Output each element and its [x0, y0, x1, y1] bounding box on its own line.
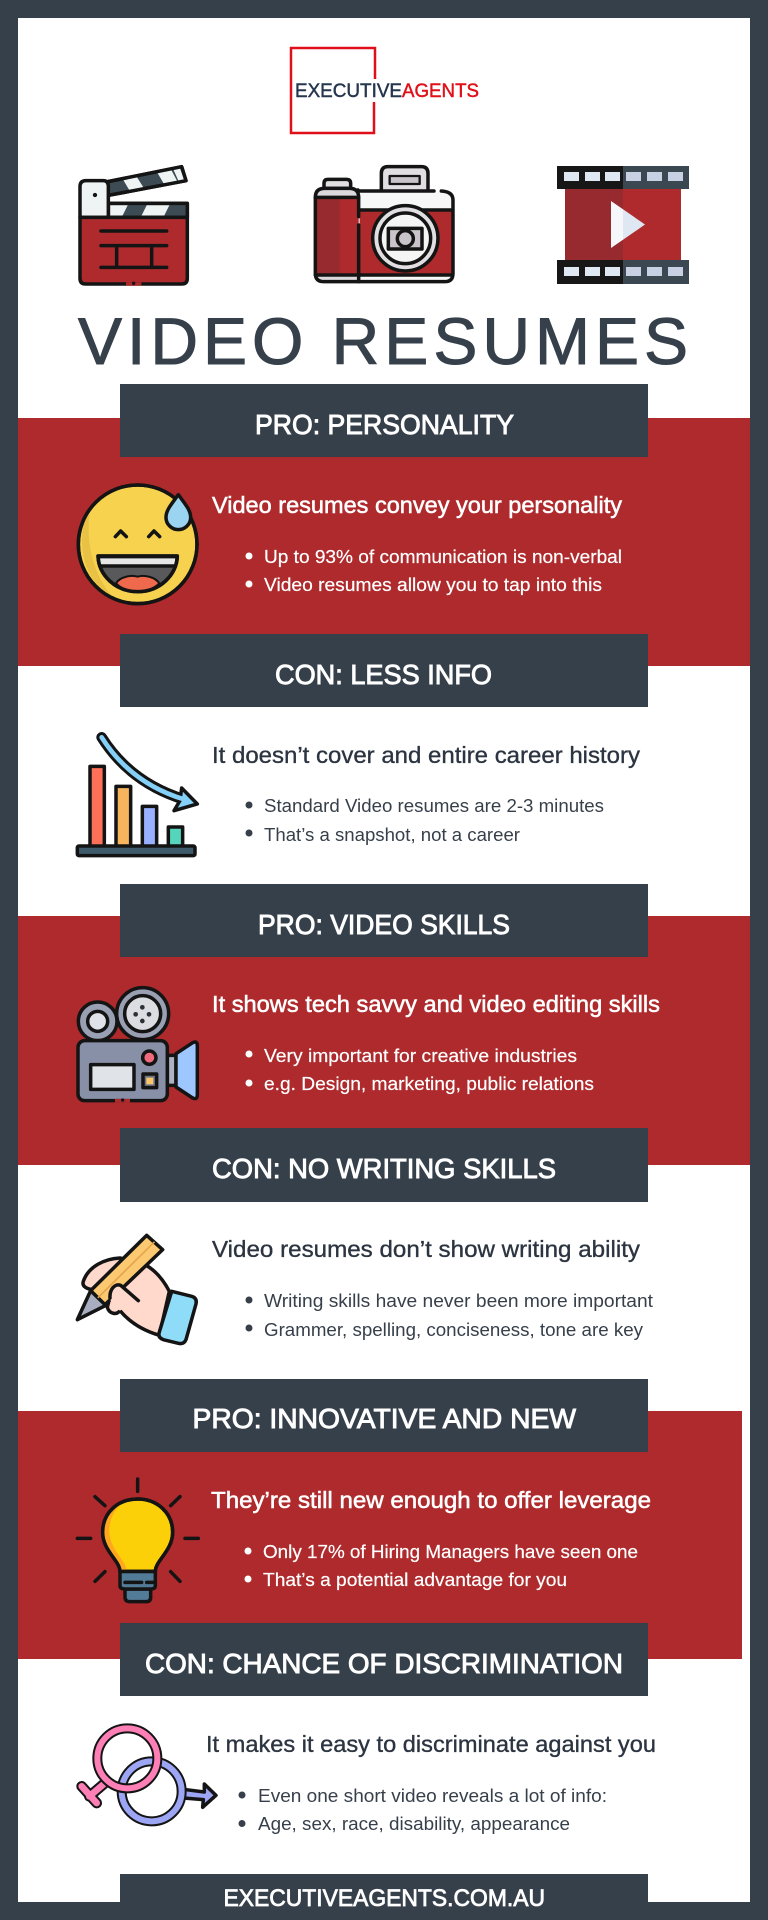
bullet list: Even one short video reveals a lot of info:: [258, 1785, 607, 1806]
icon: light bulb: [77, 1479, 198, 1602]
red band: [18, 916, 750, 1165]
subheading: Video resumes convey your personality: [212, 492, 622, 518]
bullet list: [246, 546, 622, 595]
subheading: It doesn’t cover and entire career history: [212, 742, 640, 768]
footer bar with website: EXECUTIVEAGENTS.COM.AU: [224, 1885, 545, 1912]
bullet list: Grammer, spelling, conciseness, tone are key: [264, 1319, 644, 1340]
bullet list: [246, 1045, 594, 1094]
icon: photo camera: [315, 167, 453, 282]
logo: Executive Agents: EXECUTIVE: [295, 80, 402, 102]
red band: [18, 418, 750, 666]
panel: con less info: [77, 634, 648, 856]
bullet list: Video resumes allow you to tap into this: [264, 574, 602, 595]
panel: con no writing skills: [77, 1128, 653, 1344]
bullet list: Only 17% of Hiring Managers have seen one: [263, 1541, 638, 1562]
title: VIDEO RESUMES: [78, 304, 688, 378]
icon: interlocked gender symbols: [82, 1728, 216, 1821]
header bar: PRO: PERSONALITY: [255, 409, 514, 440]
subheading: They’re still new enough to offer leverage: [211, 1487, 651, 1513]
header bar: CON: CHANCE OF DISCRIMINATION: [145, 1648, 623, 1679]
bullet list: Very important for creative industries: [264, 1045, 577, 1066]
header bar: [120, 1128, 648, 1202]
panel: pro innovative and new: [18, 1379, 742, 1659]
bullet list: [246, 1290, 653, 1340]
header bar: CON: LESS INFO: [275, 659, 492, 690]
header bar: [120, 1623, 648, 1696]
header bar: [120, 634, 648, 707]
bullet list: [238, 1785, 607, 1834]
icon: film strip with play button: [557, 166, 689, 284]
panel: con chance of discrimination: [82, 1623, 656, 1834]
red band: [18, 1411, 742, 1659]
bullet list: [244, 1541, 638, 1590]
subheading: It shows tech savvy and video editing skills: [212, 991, 660, 1017]
logo: Executive Agents: AGENTS: [402, 80, 479, 102]
bullet list: That’s a snapshot, not a career: [264, 824, 520, 845]
header bar: PRO: INNOVATIVE AND NEW: [192, 1403, 576, 1434]
bullet list: That’s a potential advantage for you: [263, 1569, 567, 1590]
bullet list: Age, sex, race, disability, appearance: [258, 1813, 570, 1834]
header bar: PRO: VIDEO SKILLS: [258, 909, 510, 940]
header bar: [120, 1379, 648, 1452]
icon: sweating laughing face: [78, 485, 197, 604]
bullet list: Writing skills have never been more important: [264, 1290, 653, 1311]
bullet list: e.g. Design, marketing, public relations: [264, 1073, 594, 1094]
subheading: It makes it easy to discriminate against you: [206, 1731, 656, 1757]
bullet list: [246, 795, 604, 845]
header bar: [120, 884, 648, 957]
footer bar with website: [120, 1874, 648, 1920]
header bar: CON: NO WRITING SKILLS: [212, 1153, 556, 1184]
header bar: [120, 384, 648, 457]
icon: falling bar chart: [77, 737, 197, 856]
icon: movie camera: [78, 988, 197, 1102]
bullet list: Up to 93% of communication is non-verbal: [264, 546, 622, 567]
icon: hand writing with pencil: [77, 1235, 196, 1344]
panel: pro personality: [18, 384, 750, 666]
bullet list: Standard Video resumes are 2-3 minutes: [264, 795, 604, 816]
panel: pro video skills: [18, 884, 750, 1165]
subheading: Video resumes don’t show writing ability: [212, 1236, 640, 1262]
icon: clapperboard: [80, 167, 187, 285]
logo: Executive Agents: [291, 48, 479, 133]
